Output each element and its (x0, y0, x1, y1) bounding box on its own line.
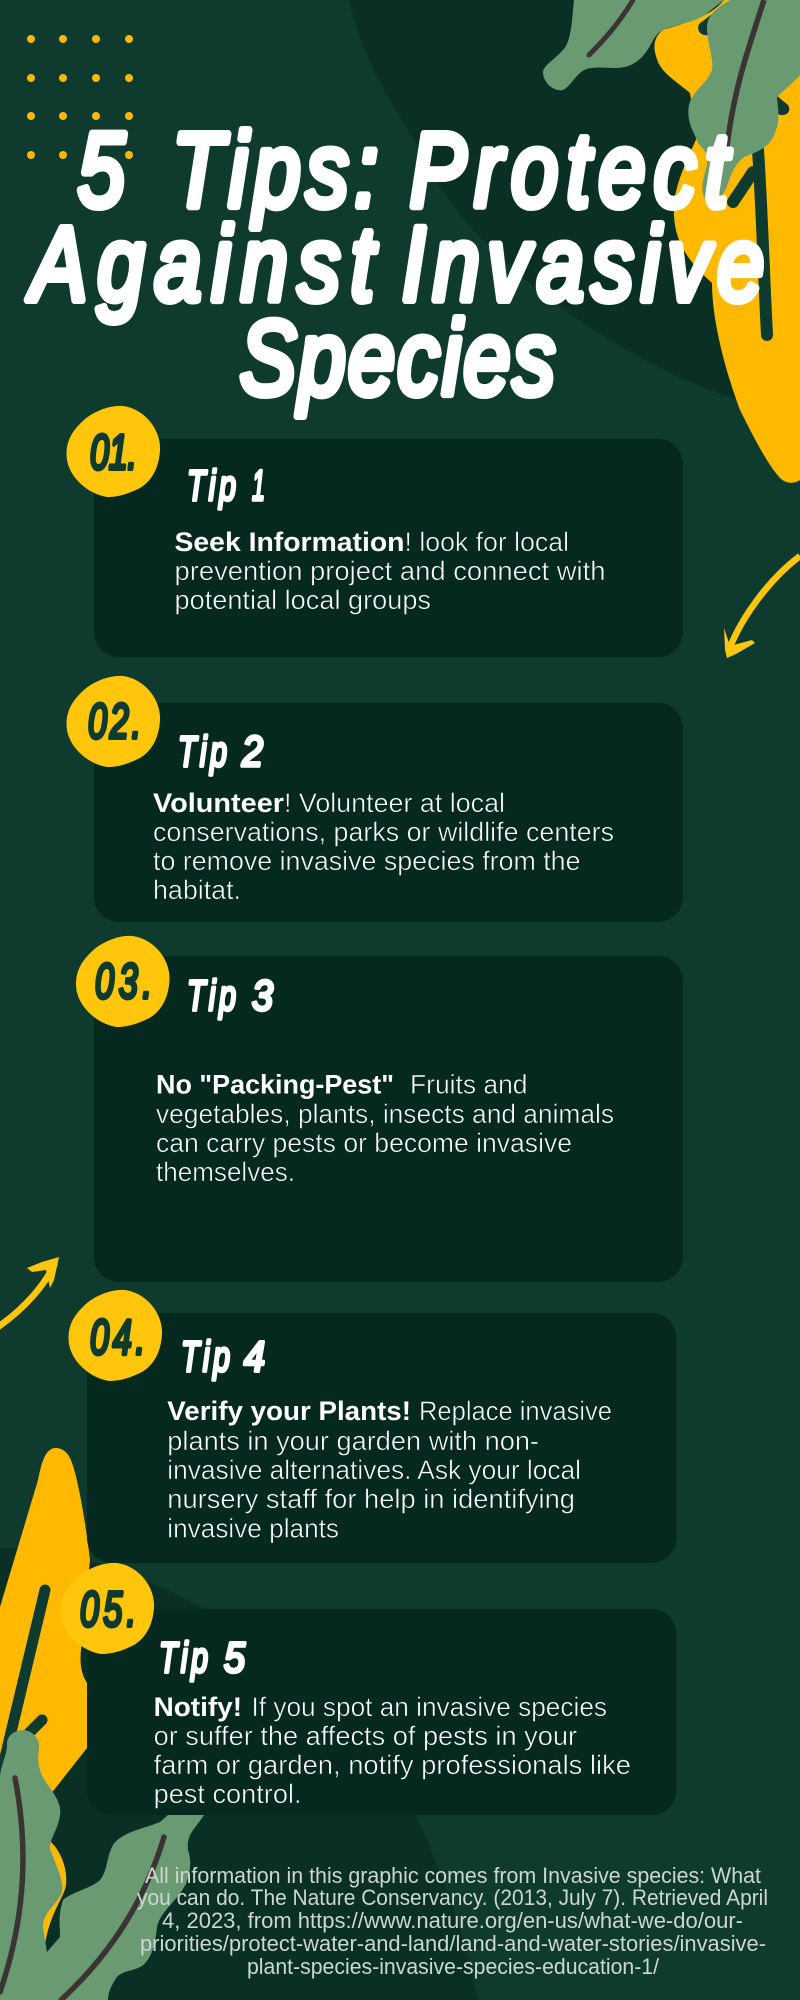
number badge 02: 02. (88, 694, 141, 748)
number badge 04 (68, 1290, 162, 1381)
number badge 05: 05. (80, 1582, 136, 1636)
panel: tip 5 card (87, 1609, 676, 1815)
text block: tip 3: vegetables, plants, insects and animals (156, 1099, 614, 1129)
panel: tip 4 card (87, 1313, 676, 1563)
heading: tip 2: Tip (178, 727, 227, 775)
text block: tip 5: pest control. (154, 1779, 302, 1809)
text block: tip 3: Fruits and (410, 1070, 528, 1100)
text block: tip 3: can carry pests or become invasive (156, 1128, 572, 1158)
dot grid (27, 35, 133, 159)
text block: tip 5: If you spot an invasive species (252, 1692, 607, 1722)
text block: tip 1 (174, 527, 606, 615)
number badge 04: 04. (90, 1310, 145, 1364)
arrow: right curved arrow (724, 556, 800, 658)
text block: tip 5: Notify! (154, 1692, 242, 1722)
title: Against (27, 206, 377, 323)
icon: yellow leaf top right (654, 0, 800, 483)
heading: tip 1 (187, 461, 265, 510)
number badge 03 (76, 936, 170, 1027)
heading: tip 3: Tip (187, 971, 236, 1019)
panel: tip 1 card (94, 439, 683, 657)
heading: tip 4 (181, 1332, 265, 1381)
icon: dark notches between leaves (698, 14, 789, 115)
source note: you can do. The Nature Conservancy. (2013, July 7). Retrieved April (137, 1885, 768, 1910)
text block: tip 3: No "Packing-Pest" (156, 1070, 394, 1100)
text block: tip 4 (167, 1396, 612, 1544)
icon: yellow leaf bottom left (0, 1448, 90, 1860)
number badge 01 (66, 406, 160, 497)
heading: tip 5 (159, 1633, 246, 1682)
text block: tip 1: prevention project and connect with (174, 556, 606, 586)
heading: tip 4: Tip (181, 1332, 230, 1380)
text block: tip 5: farm or garden, notify professionals like (154, 1750, 631, 1780)
heading: tip 3 (187, 971, 273, 1020)
dark background shape: bottom left (0, 1548, 477, 2000)
text block: tip 2: Volunteer (153, 788, 285, 818)
source note: All information in this graphic comes from Invasive species: What (145, 1863, 761, 1888)
heading: tip 1: 1 (252, 462, 265, 510)
text block: tip 2: ! Volunteer at local (284, 788, 505, 818)
number badge 03: 03. (95, 954, 152, 1008)
text block: tip 4: Replace invasive (419, 1396, 612, 1426)
text block: tip 2: habitat. (153, 875, 241, 905)
source note: plant-species-invasive-species-education-1/ (247, 1954, 660, 1979)
title: Protect (410, 112, 731, 229)
text block: tip 1: potential local groups (174, 585, 431, 615)
arrow: left curved arrow (0, 1257, 59, 1327)
text block: tip 4: invasive plants (167, 1514, 339, 1544)
text block: tip 2: conservations, parks or wildlife centers (153, 817, 614, 847)
text block: tip 4: invasive alternatives. Ask your local (167, 1455, 581, 1485)
text block: tip 4: nursery staff for help in identifying (167, 1484, 575, 1514)
heading: tip 5: 5 (224, 1634, 246, 1682)
text block: tip 1: ! look for local (404, 527, 569, 557)
heading: tip 1: Tip (187, 461, 236, 509)
text block: tip 4: plants in your garden with non- (167, 1426, 539, 1456)
source note: priorities/protect-water-and-land/land-and-water-stories/invasive- (140, 1931, 766, 1956)
text block: tip 3: themselves. (156, 1157, 295, 1187)
heading: tip 2: 2 (241, 728, 263, 776)
text block: tip 4: Verify your Plants! (167, 1396, 411, 1426)
panel: tip 3 card (94, 956, 683, 1282)
icon: green leaf bottom left (0, 1730, 204, 2000)
icon: green leaf right top (688, 0, 800, 200)
icon: yellow leaf stems (733, 150, 767, 335)
title: 5 (78, 112, 126, 229)
number badge 01: 01. (90, 425, 137, 479)
source note (137, 1863, 768, 1979)
text block: tip 2: to remove invasive species from the (153, 846, 580, 876)
text block: tip 1: Seek Information (174, 527, 404, 557)
number badge 02 (66, 676, 160, 767)
heading: tip 4: 4 (244, 1333, 265, 1381)
title: Species (240, 300, 555, 417)
number badge 05 (60, 1563, 154, 1654)
panel: tip 2 card (94, 703, 683, 922)
text block: tip 5: or suffer the affects of pests in your (154, 1721, 577, 1751)
title: Invasive (402, 206, 764, 323)
dark background shape: top right (349, 0, 800, 420)
title (27, 112, 764, 417)
text block: tip 5 (154, 1692, 631, 1809)
icon: green leaf left top (543, 0, 724, 90)
icon: yellow strip behind bottom leaf (40, 1840, 66, 1950)
source note: 4, 2023, from https://www.nature.org/en-us/what-we-do/our- (162, 1908, 743, 1933)
text block: tip 2 (153, 788, 614, 905)
text block: tip 3 (156, 1070, 614, 1187)
heading: tip 2 (178, 727, 263, 776)
title: Tips: (172, 112, 378, 229)
heading: tip 3: 3 (252, 972, 273, 1020)
heading: tip 5: Tip (159, 1633, 208, 1681)
